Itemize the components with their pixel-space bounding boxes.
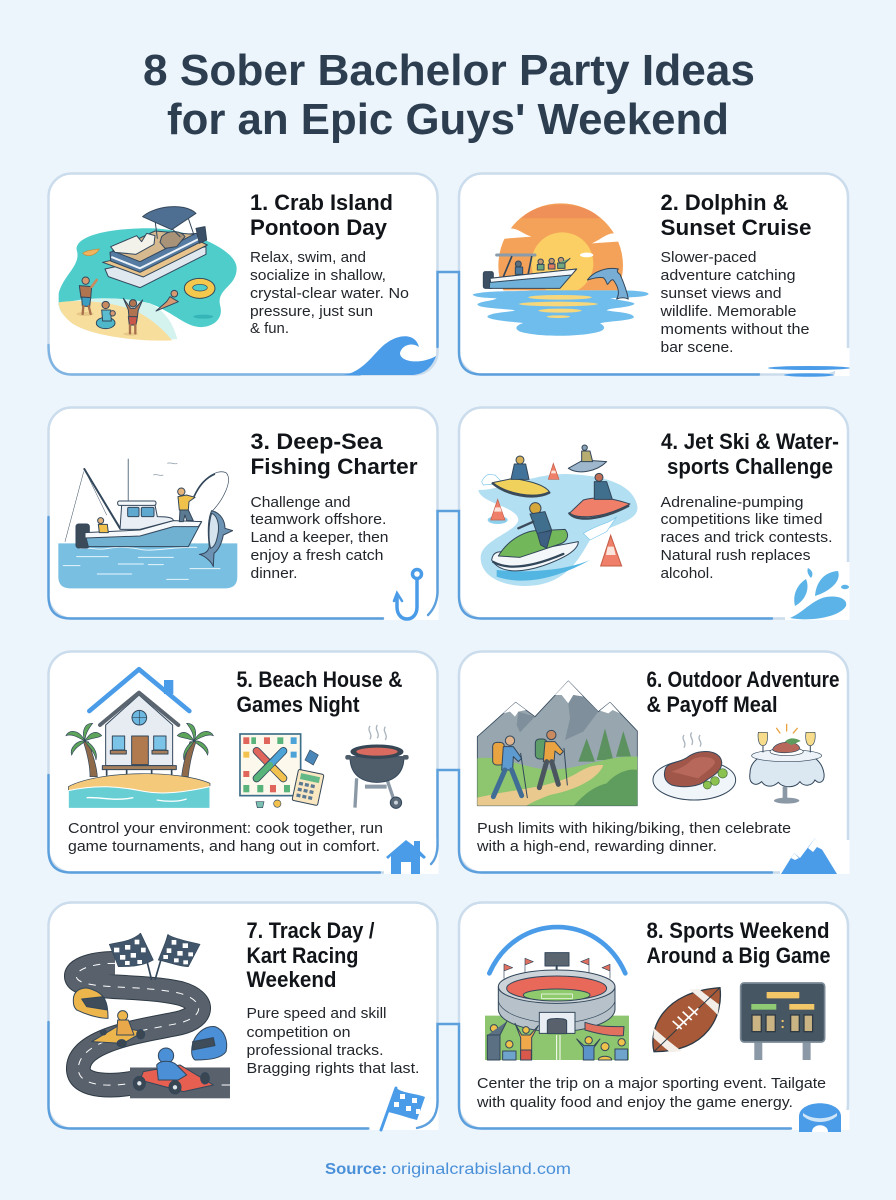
football — [653, 988, 720, 1052]
yellow kart — [92, 1011, 145, 1047]
panel: 1. Crab Island Pontoon Day — [48, 174, 438, 375]
body text — [250, 249, 409, 337]
heading: Fishing Charter — [250, 454, 418, 479]
body text — [660, 494, 832, 582]
icon: fishing hook — [394, 570, 422, 619]
heading: 8. Sports Weekend — [646, 918, 830, 943]
boat — [483, 255, 577, 288]
heading — [250, 429, 418, 479]
panel: 6. Outdoor Adventure & Payoff Meal — [438, 652, 850, 874]
body text: bar scene. — [660, 339, 734, 356]
grill — [345, 725, 409, 808]
illustration: sunset cruise — [473, 203, 649, 336]
yellow helmet — [73, 988, 108, 1018]
illustration: stadium — [485, 927, 825, 1060]
body text: Bragging rights that last. — [246, 1060, 420, 1077]
body text: pressure, just sun — [250, 303, 373, 320]
heading: Kart Racing — [246, 943, 358, 968]
body text: Pure speed and skill — [246, 1005, 386, 1022]
house — [100, 693, 178, 775]
icon: wave — [343, 336, 436, 375]
red jet ski — [569, 473, 630, 519]
heading: 6. Outdoor Adventure — [646, 667, 840, 692]
heading: Pontoon Day — [250, 215, 387, 240]
body text: Relax, swim, and — [250, 249, 366, 266]
body text — [476, 1075, 826, 1111]
body text: & fun. — [250, 320, 289, 337]
body text: Slower-paced — [660, 249, 756, 266]
body text: competitions like timed — [660, 511, 822, 528]
title — [143, 46, 755, 144]
heading — [250, 190, 393, 240]
title: for an Epic Guys' Weekend — [167, 95, 729, 144]
green jet ski — [492, 503, 578, 571]
heading: Weekend — [246, 967, 336, 992]
body text: professional tracks. — [246, 1042, 384, 1059]
connector line — [438, 770, 772, 872]
body text: crystal-clear water. No — [250, 285, 409, 302]
body text: with a high-end, rewarding dinner. — [476, 838, 717, 855]
illustration: hikers and mountains — [477, 681, 637, 806]
heading: 3. Deep-Sea — [250, 429, 383, 454]
board game — [240, 734, 324, 808]
blue helmet — [192, 1026, 227, 1060]
panel: 3. Deep-Sea Fishing Charter — [48, 408, 438, 620]
panel: 4. Jet Ski & Water-sports Challenge — [438, 408, 850, 620]
illustration: beach house — [66, 669, 409, 808]
heading — [236, 667, 402, 717]
body text — [246, 1005, 420, 1077]
heading: Games Night — [236, 692, 360, 717]
body text — [476, 820, 791, 855]
checkered flags — [109, 933, 200, 980]
heading — [646, 918, 830, 968]
illustration: race track — [73, 933, 230, 1098]
body text: races and trick contests. — [660, 529, 832, 546]
panel: 8. Sports Weekend Around a Big Game — [438, 902, 850, 1132]
body text: with quality food and enjoy the game energy. — [476, 1094, 793, 1111]
icon: mountains — [781, 838, 837, 874]
hikers — [493, 730, 567, 798]
scoreboard — [741, 983, 825, 1060]
palms — [66, 723, 213, 777]
dolphin — [587, 268, 628, 299]
heading: sports Challenge — [667, 454, 833, 479]
source line: Source: — [325, 1161, 387, 1178]
connector line — [438, 1024, 791, 1128]
body text — [250, 494, 388, 582]
heading — [246, 918, 375, 992]
body text: dinner. — [250, 565, 298, 582]
red kart — [133, 1048, 213, 1094]
panel: 7. Track Day / Kart Racing Weekend — [48, 902, 438, 1130]
body text: alcohol. — [660, 565, 714, 582]
boat — [65, 459, 202, 548]
heading: 4. Jet Ski & Water- — [661, 429, 839, 454]
swim ring — [184, 278, 215, 298]
grey jet ski — [568, 445, 607, 472]
body text: competition on — [246, 1024, 350, 1041]
body text: Natural rush replaces — [660, 547, 810, 564]
body text: Push limits with hiking/biking, then celebrate — [477, 820, 791, 837]
connector line — [438, 511, 772, 618]
body text: sunset views and — [660, 285, 782, 302]
beachgoers — [76, 277, 178, 336]
heading: 2. Dolphin & — [660, 190, 788, 215]
body text: Center the trip on a major sporting event. Tailgate — [477, 1075, 826, 1092]
illustration: pontoon boat at sandbar — [59, 207, 237, 341]
illustration: steak dinner — [653, 732, 736, 800]
heading — [646, 667, 840, 717]
body text: Challenge and — [250, 494, 350, 511]
heading: 7. Track Day / — [246, 918, 375, 943]
body text: moments without the — [660, 321, 810, 338]
body text: game tournaments, and hang out in comfort. — [68, 838, 380, 855]
heading: 5. Beach House & — [236, 667, 402, 692]
icon: stadium — [799, 1103, 841, 1132]
body text: wildlife. Memorable — [659, 303, 796, 320]
illustration: fishing boat — [58, 459, 237, 588]
scoreboard and flags — [504, 953, 610, 978]
body text: enjoy a fresh catch — [250, 547, 384, 564]
body text — [659, 249, 810, 356]
source line — [325, 1161, 571, 1178]
fans — [487, 1022, 628, 1060]
panel: 2. Dolphin & Sunset Cruise — [438, 174, 850, 377]
body text: adventure catching — [660, 267, 796, 284]
heading: 1. Crab Island — [250, 190, 393, 215]
body text: Land a keeper, then — [250, 529, 388, 546]
yellow jet ski — [493, 456, 549, 496]
heading — [660, 190, 812, 240]
connector line — [438, 272, 759, 374]
heading — [661, 429, 839, 479]
body text: Adrenaline-pumping — [660, 494, 804, 511]
cones — [488, 463, 622, 566]
stadium bowl — [498, 970, 615, 1034]
title: 8 Sober Bachelor Party Ideas — [143, 46, 755, 95]
body text: socialize in shallow, — [250, 267, 386, 284]
pontoon boat — [103, 207, 207, 288]
water — [473, 290, 649, 336]
heading: & Payoff Meal — [646, 692, 778, 717]
icon: water splash — [790, 568, 849, 619]
illustration: fancy table — [750, 724, 824, 804]
panel: 5. Beach House & Games Night — [48, 652, 438, 874]
heading: Around a Big Game — [646, 943, 830, 968]
leaping fish — [199, 511, 233, 567]
icon: checkered flag — [381, 1088, 425, 1130]
source line: originalcrabisland.com — [391, 1161, 571, 1178]
icon: house — [386, 840, 426, 874]
heading: Sunset Cruise — [660, 215, 812, 240]
body text: teamwork offshore. — [250, 511, 386, 528]
icon: water ripples — [768, 366, 850, 377]
illustration: jet skis — [478, 445, 637, 586]
body text: Control your environment: cook together, run — [68, 820, 383, 837]
body text — [68, 820, 383, 855]
